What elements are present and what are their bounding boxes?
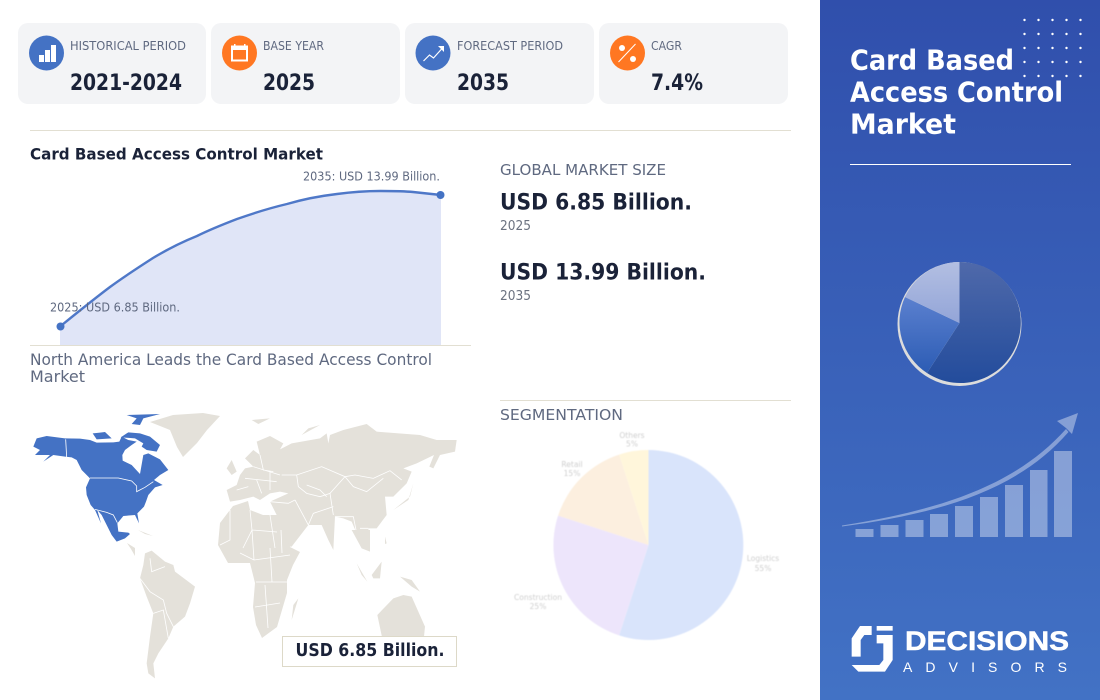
logo wordmark: ADVISORS bbox=[903, 659, 1067, 675]
region: South America bbox=[140, 551, 195, 678]
callout: map value: USD 6.85 Billion. bbox=[296, 640, 444, 661]
block: global market size: 2025 bbox=[500, 219, 531, 234]
stat card: historical period: 2021-2024 bbox=[70, 70, 182, 96]
pie chart: segmentation bbox=[514, 431, 779, 640]
icon: percent bbox=[610, 36, 645, 70]
region: Africa bbox=[218, 501, 300, 638]
stat card: forecast period bbox=[405, 23, 594, 104]
area chart: market growth bbox=[50, 170, 444, 345]
icon: trend arrow bbox=[416, 36, 450, 70]
stat card: base year: 2025 bbox=[263, 70, 315, 96]
stat card: CAGR: 7.4% bbox=[651, 70, 703, 96]
block: global market size: USD 6.85 Billion. bbox=[500, 190, 692, 216]
heading: segmentation: SEGMENTATION bbox=[500, 406, 623, 424]
icon: sidebar pie bbox=[898, 262, 1022, 386]
pie chart: segmentation: 25% bbox=[530, 602, 546, 611]
pie chart: segmentation: Logistics bbox=[747, 554, 779, 563]
label: 2025 value: 2025: USD 6.85 Billion. bbox=[50, 300, 180, 314]
region: North America highlighted bbox=[33, 414, 168, 542]
world map bbox=[33, 413, 457, 678]
stat card: CAGR bbox=[599, 23, 788, 104]
sidebar title: Access Control bbox=[850, 76, 1063, 108]
stat card: historical period: HISTORICAL PERIOD bbox=[70, 39, 186, 53]
pie chart: segmentation: Others bbox=[619, 431, 645, 440]
block: global market size bbox=[500, 161, 706, 304]
stat card: historical period bbox=[18, 23, 206, 104]
stat card: CAGR: CAGR bbox=[651, 39, 682, 53]
stat card: forecast period: 2035 bbox=[457, 70, 509, 96]
pie chart: segmentation: 5% bbox=[626, 440, 638, 448]
region: Eurasia bbox=[227, 418, 457, 550]
region: Greenland bbox=[150, 413, 220, 457]
callout: map value bbox=[282, 636, 456, 666]
pie chart: segmentation: 15% bbox=[564, 469, 580, 478]
icon: growth bars and arrow bbox=[842, 413, 1078, 537]
heading: map title: Market bbox=[30, 367, 85, 386]
panel: sidebar bbox=[820, 0, 1100, 700]
stat card: base year: BASE YEAR bbox=[263, 39, 324, 53]
icon: calendar bbox=[222, 36, 257, 70]
label: 2035 value: 2035: USD 13.99 Billion. bbox=[303, 170, 440, 184]
sidebar title bbox=[850, 44, 1063, 140]
region: Oceania and islands bbox=[292, 530, 425, 643]
block: global market size: 2035 bbox=[500, 289, 531, 304]
heading: chart title: Card Based Access Control Market bbox=[30, 144, 323, 164]
icon: bar chart bbox=[29, 36, 64, 70]
logo wordmark bbox=[903, 626, 1069, 675]
logo bbox=[852, 626, 1069, 675]
decoration: dot grid bbox=[1023, 19, 1082, 77]
stat card: base year bbox=[211, 23, 400, 104]
block: global market size: USD 13.99 Billion. bbox=[500, 260, 706, 286]
heading: map title bbox=[30, 350, 432, 386]
pie chart: segmentation: Construction bbox=[514, 593, 562, 602]
sidebar title: Card Based bbox=[850, 44, 1014, 76]
logo mark bbox=[852, 626, 893, 672]
stat card: forecast period: FORECAST PERIOD bbox=[457, 39, 563, 53]
heading: map title: North America Leads the Card Based Access Control bbox=[30, 350, 432, 369]
logo wordmark: DECISIONS bbox=[905, 626, 1069, 656]
pie chart: segmentation: 55% bbox=[755, 564, 771, 573]
region: Central America and Caribbean bbox=[127, 530, 153, 556]
sidebar title: Market bbox=[850, 108, 956, 140]
pie chart: segmentation: Retail bbox=[561, 460, 583, 469]
block: global market size: GLOBAL MARKET SIZE bbox=[500, 161, 666, 179]
